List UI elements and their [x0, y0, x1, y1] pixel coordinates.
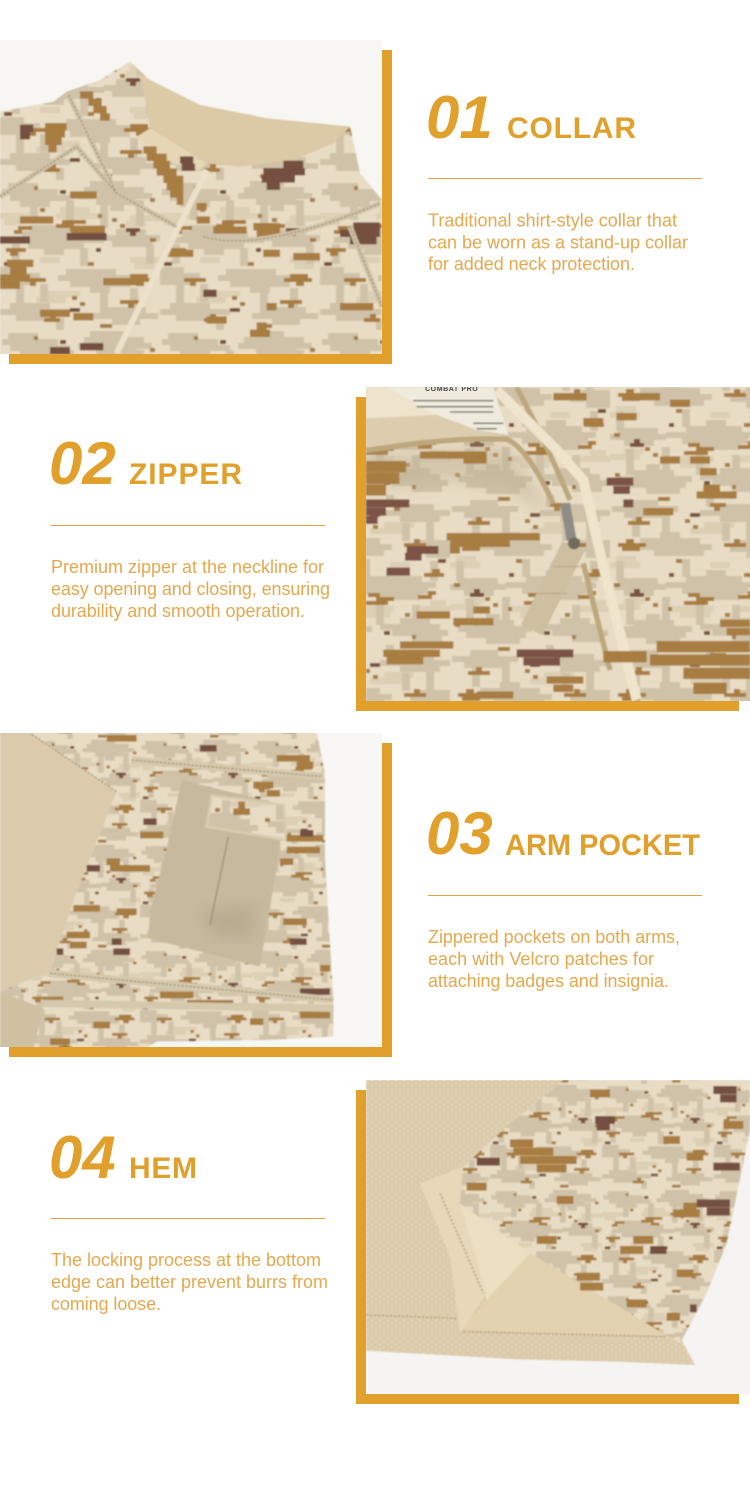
- panel: zipper photo with orange frame: [356, 386, 750, 711]
- text block: hem description: coming loose.: [51, 1294, 161, 1314]
- text block: collar description: [428, 210, 688, 274]
- photo: arm pocket: [0, 732, 382, 1048]
- text block: hem description: [51, 1250, 328, 1314]
- photo: camouflage shirt collar: [0, 40, 382, 357]
- heading: 04 hem: [49, 1124, 197, 1191]
- text block: arm pocket description: attaching badges and insignia.: [428, 971, 669, 991]
- text block: zipper description: durability and smooth operation.: [51, 601, 305, 621]
- text block: hem description: edge can better prevent burrs from: [51, 1272, 328, 1292]
- photo: zipper close-up: [366, 386, 750, 704]
- heading: 03 arm pocket: [426, 800, 700, 867]
- divider line: [51, 1218, 325, 1219]
- text block: arm pocket description: [428, 927, 680, 991]
- orange frame: [9, 743, 392, 1057]
- heading: 02 zipper: 02: [49, 430, 116, 497]
- orange frame: [356, 1090, 739, 1404]
- label text on garment tag: COMBAT PRO: [425, 386, 478, 393]
- heading: 01 collar: COLLAR: [507, 112, 636, 145]
- heading: 02 zipper: [49, 430, 242, 497]
- text block: zipper description: easy opening and closing, ensuring: [51, 579, 330, 599]
- panel: arm pocket photo with orange frame: [0, 732, 392, 1057]
- heading: 03 arm pocket: ARM POCKET: [505, 829, 700, 862]
- divider line: [428, 895, 702, 896]
- divider line: [428, 178, 702, 179]
- heading: 01 collar: 01: [426, 84, 493, 151]
- text block: arm pocket description: each with Velcro patches for: [428, 949, 654, 969]
- text block: zipper description: [51, 557, 330, 621]
- text block: collar description: for added neck protection.: [428, 254, 635, 274]
- heading: 02 zipper: ZIPPER: [129, 458, 242, 491]
- orange frame: [356, 397, 739, 711]
- heading: 03 arm pocket: 03: [426, 800, 493, 867]
- orange frame: [9, 50, 392, 364]
- panel: hem photo with orange frame: [356, 1080, 750, 1404]
- heading: 01 collar: [426, 84, 636, 151]
- text block: zipper description: Premium zipper at the neckline for: [51, 557, 324, 577]
- text block: hem description: The locking process at the bottom: [51, 1250, 321, 1270]
- heading: 04 hem: 04: [49, 1124, 116, 1191]
- text block: arm pocket description: Zippered pockets on both arms,: [428, 927, 680, 947]
- panel: collar photo with orange frame: [0, 40, 392, 364]
- heading: 04 hem: HEM: [129, 1152, 197, 1185]
- text block: collar description: can be worn as a stand-up collar: [428, 232, 688, 252]
- divider line: [51, 525, 325, 526]
- text block: collar description: Traditional shirt-style collar that: [428, 210, 677, 230]
- photo: folded hem: [366, 1080, 750, 1394]
